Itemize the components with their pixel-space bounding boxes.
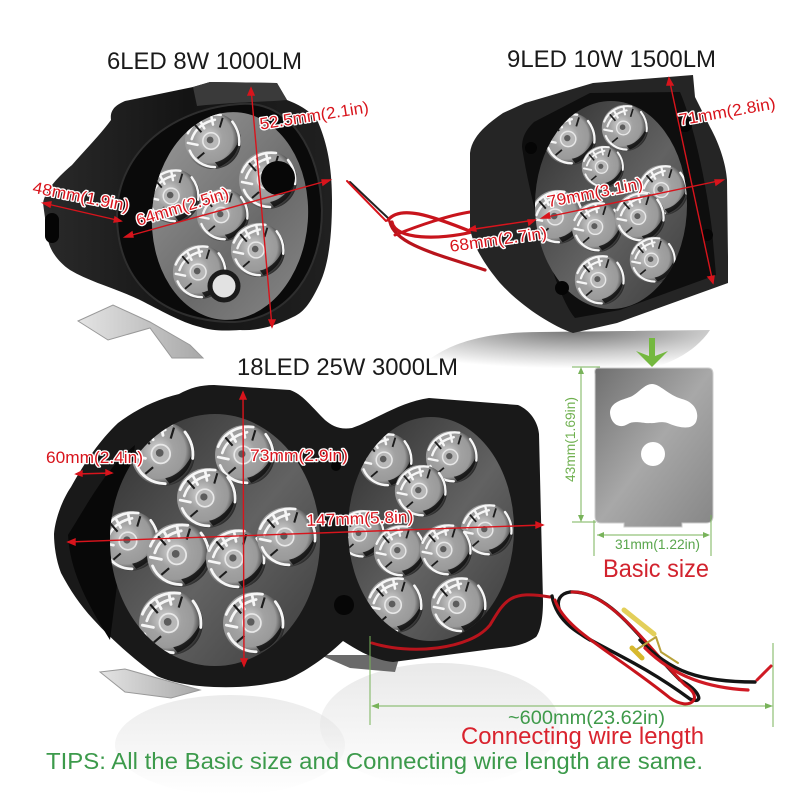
title: 18LED: 18LED 25W 3000LM <box>237 354 458 381</box>
label: 60mm(2.4in) <box>46 449 143 467</box>
label: 52.5mm(2.1in) <box>258 99 370 134</box>
label: 73mm(2.9in) <box>250 447 348 465</box>
top mount <box>193 82 287 106</box>
label: 48mm(1.9in) <box>31 179 131 215</box>
icon: green down arrow <box>636 338 668 367</box>
arrows <box>68 392 543 666</box>
left rim shading <box>68 445 135 640</box>
lens face <box>145 107 315 325</box>
label: 79mm(3.1in) <box>546 175 644 211</box>
dimension: wire length <box>370 636 773 729</box>
lamp: 6LED <box>43 82 332 358</box>
round hole <box>641 442 665 466</box>
label: 43mm(1.69in) <box>562 397 578 482</box>
tips: TIPS: All the Basic size and Connecting wire length are same. <box>46 748 703 774</box>
yellow connector <box>624 610 654 634</box>
housing <box>43 82 332 331</box>
label: 71mm(2.8in) <box>677 95 777 129</box>
label: 68mm(2.7in) <box>449 224 548 256</box>
lamp: 18LED <box>54 385 543 698</box>
arrows <box>468 78 723 283</box>
wires: 9LED <box>347 181 485 270</box>
label: ~600mm(23.62in) <box>508 707 665 729</box>
label: 31mm(1.22in) <box>615 536 700 552</box>
lamp: 9LED <box>470 75 728 333</box>
bracket <box>78 305 203 358</box>
title: 9LED: 9LED 10W 1500LM <box>507 46 716 73</box>
dimension: plate width <box>594 515 711 556</box>
caption: basic size: Basic size <box>603 555 709 583</box>
lens face <box>535 101 687 309</box>
housing <box>470 75 728 333</box>
dimensions: 6LED <box>31 88 370 327</box>
caption: connecting wire length: Connecting wire length <box>461 723 704 750</box>
dimensions: 9LED <box>449 78 777 283</box>
background reflections <box>115 330 710 795</box>
dimensions: 18LED <box>46 392 543 666</box>
connecting wire <box>372 592 771 704</box>
label: 147mm(5.8in) <box>306 508 414 530</box>
basic size bracket plate <box>595 368 713 527</box>
housing <box>54 385 543 687</box>
rim <box>522 92 716 318</box>
arrows <box>43 88 330 327</box>
rim <box>117 104 322 322</box>
title: 6LED: 6LED 8W 1000LM <box>107 48 302 75</box>
dimension: plate height <box>562 367 600 522</box>
bracket <box>100 669 200 698</box>
heart-shaped slot <box>610 384 697 428</box>
label: 64mm(2.5in) <box>134 185 231 230</box>
left lens face <box>110 414 320 666</box>
right lens face <box>348 417 514 641</box>
